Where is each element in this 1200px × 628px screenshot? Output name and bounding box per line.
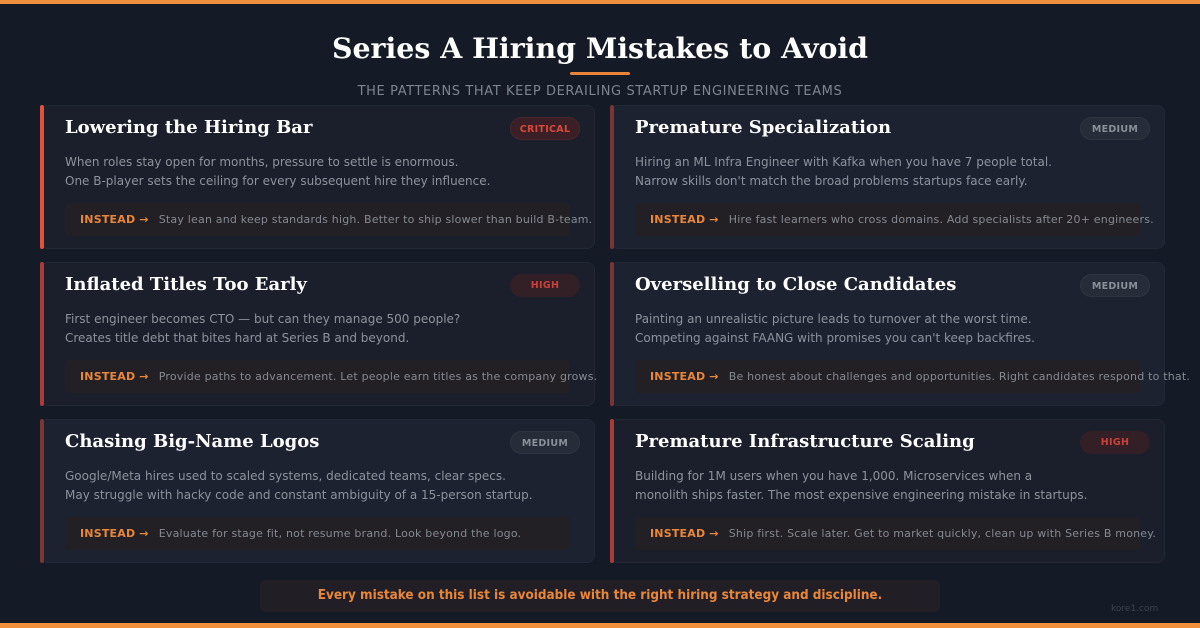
brand: kore1.com xyxy=(1111,604,1158,614)
badge: high: HIGH xyxy=(531,280,559,291)
footer callout: Every mistake on this list is avoidable with the right hiring strategy and discipline. xyxy=(318,588,882,603)
description: One B-player sets the ceiling for every subsequent hire they influence. xyxy=(65,174,490,188)
panel: premature specialization xyxy=(610,105,1165,249)
panel: big-name logos xyxy=(40,419,595,563)
instead callout xyxy=(635,517,1140,550)
instead callout xyxy=(65,203,570,236)
badge: medium xyxy=(1080,117,1150,140)
description: Competing against FAANG with promises you can't keep backfires. xyxy=(635,331,1035,345)
description xyxy=(65,312,460,345)
heading: Premature Infrastructure Scaling xyxy=(635,431,975,452)
description xyxy=(65,155,490,188)
instead callout: INSTEAD → Hire fast learners who cross domains. Add specialists after 20+ engineers. xyxy=(650,213,1154,226)
heading: Inflated Titles Too Early xyxy=(65,274,307,295)
heading: Overselling to Close Candidates xyxy=(635,274,956,295)
heading: Chasing Big-Name Logos xyxy=(65,431,319,452)
badge: medium xyxy=(1080,274,1150,297)
panel: inflated titles xyxy=(40,262,595,406)
instead callout: INSTEAD → Evaluate for stage fit, not resume brand. Look beyond the logo. xyxy=(80,527,521,540)
description: monolith ships faster. The most expensive engineering mistake in startups. xyxy=(635,488,1087,502)
description: When roles stay open for months, pressure to settle is enormous. xyxy=(65,155,458,169)
instead callout xyxy=(65,360,570,393)
badge: critical xyxy=(510,117,580,140)
panel: infrastructure scaling xyxy=(610,419,1165,563)
badge: medium: MEDIUM xyxy=(1092,281,1138,292)
badge: high xyxy=(1080,431,1150,454)
footer callout xyxy=(260,580,940,612)
description: Google/Meta hires used to scaled systems, dedicated teams, clear specs. xyxy=(65,469,506,483)
title: Series A Hiring Mistakes to Avoid xyxy=(332,31,868,65)
description: May struggle with hacky code and constant ambiguity of a 15-person startup. xyxy=(65,488,533,502)
badge: medium: MEDIUM xyxy=(1092,124,1138,135)
description xyxy=(65,469,533,502)
instead callout xyxy=(635,360,1140,393)
description xyxy=(635,312,1035,345)
subtitle: THE PATTERNS THAT KEEP DERAILING STARTUP ENGINEERING TEAMS xyxy=(358,84,842,99)
description: Painting an unrealistic picture leads to turnover at the worst time. xyxy=(635,312,1032,326)
instead callout xyxy=(65,517,570,550)
description xyxy=(635,469,1087,502)
panel: lowering the hiring bar xyxy=(40,105,595,249)
description: First engineer becomes CTO — but can they manage 500 people? xyxy=(65,312,460,326)
badge: medium xyxy=(510,431,580,454)
badge: high xyxy=(510,274,580,297)
description: Building for 1M users when you have 1,000. Microservices when a xyxy=(635,469,1032,483)
description: Narrow skills don't match the broad problems startups face early. xyxy=(635,174,1028,188)
instead callout: INSTEAD → Provide paths to advancement. Let people earn titles as the company grows. xyxy=(80,370,597,383)
instead callout: INSTEAD → Stay lean and keep standards high. Better to ship slower than build B-team. xyxy=(80,213,592,226)
badge: medium: MEDIUM xyxy=(522,438,568,449)
heading: Premature Specialization xyxy=(635,117,891,138)
badge: critical: CRITICAL xyxy=(520,124,570,135)
instead callout: INSTEAD → Be honest about challenges and opportunities. Right candidates respond to that. xyxy=(650,370,1190,383)
description xyxy=(635,155,1052,188)
heading: Lowering the Hiring Bar xyxy=(65,117,312,138)
description: Creates title debt that bites hard at Series B and beyond. xyxy=(65,331,409,345)
instead callout: INSTEAD → Ship first. Scale later. Get to market quickly, clean up with Series B money. xyxy=(650,527,1156,540)
instead callout xyxy=(635,203,1140,236)
description: Hiring an ML Infra Engineer with Kafka when you have 7 people total. xyxy=(635,155,1052,169)
badge: high: HIGH xyxy=(1101,437,1129,448)
panel: overselling xyxy=(610,262,1165,406)
